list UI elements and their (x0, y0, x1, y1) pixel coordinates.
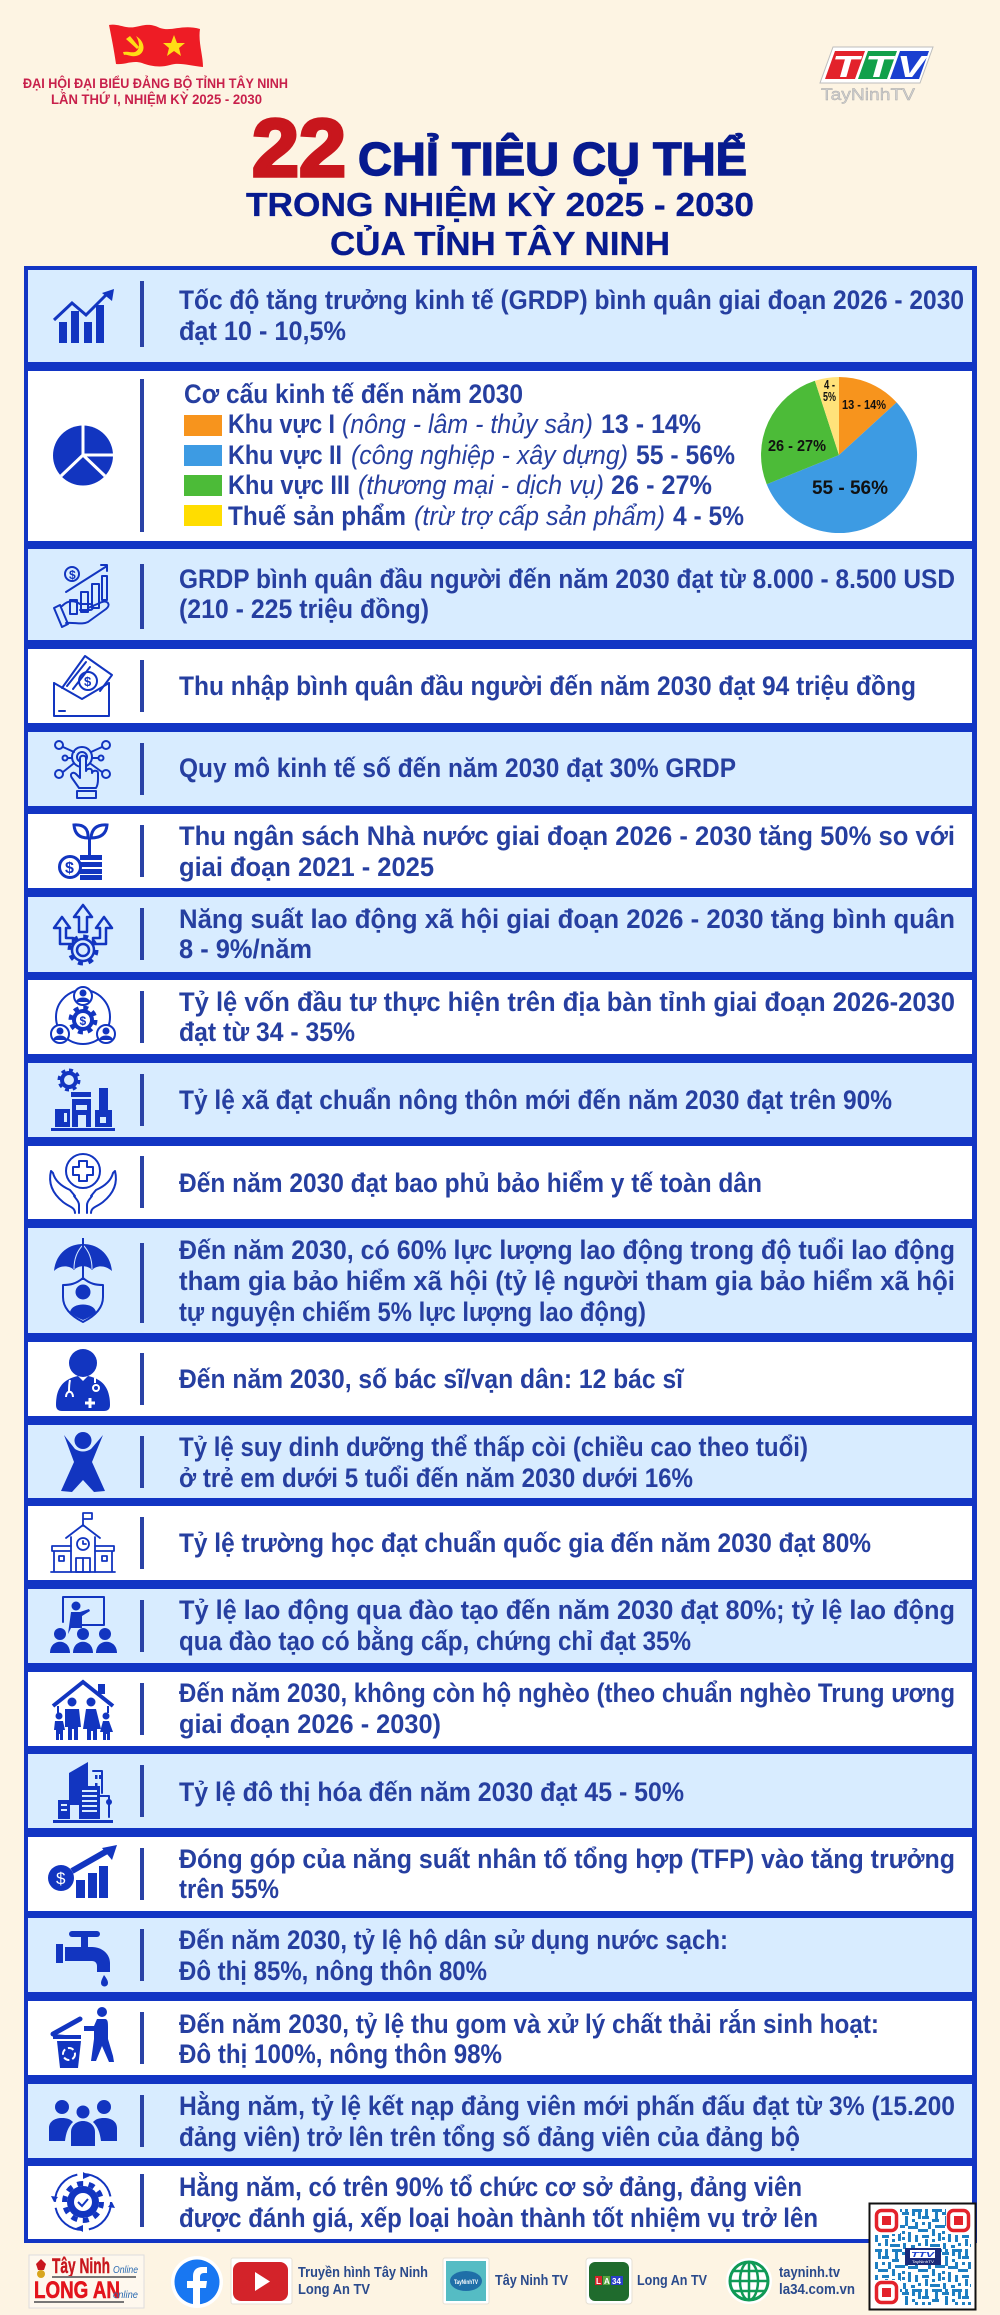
text: target 6: Thu ngân sách Nhà nước giai đoạn 2026 - 2030 tăng 50% so với (179, 821, 955, 851)
text: target 6: giai đoạn 2021 - 2025 (179, 852, 434, 882)
text: target 11: Đến năm 2030, có 60% lực lượng lao động trong độ tuổi lao động (179, 1235, 955, 1265)
text: target 8: đạt từ 34 - 35% (179, 1017, 355, 1047)
icon: hands with medical cross (50, 1154, 116, 1213)
text: target 13: Tỷ lệ suy dinh dưỡng thể thấp còi (chiều cao theo tuổi) (179, 1432, 808, 1462)
panel: target 21 new party members (28, 2084, 972, 2158)
icon: website globe (726, 2258, 772, 2304)
panel: target 11 social insurance (28, 1228, 972, 1333)
footer: newspaper logo Tay Ninh Online / Long An: Online (113, 2265, 138, 2276)
icon: envelope with money: $ (84, 674, 92, 689)
text: target 8: Tỷ lệ vốn đầu tư thực hiện trên địa bàn tỉnh giai đoạn 2026-2030 (179, 987, 955, 1017)
legend: sector III: 26 - 27% (611, 470, 712, 500)
title (246, 103, 754, 262)
text: target 15: Tỷ lệ lao động qua đào tạo đến năm 2030 đạt 80%; tỷ lệ lao động (179, 1595, 955, 1625)
icon: YouTube (231, 2258, 292, 2304)
text: target 7: 8 - 9%/năm (179, 934, 312, 964)
icon: envelope with money (54, 656, 112, 716)
text: structure heading: Cơ cấu kinh tế đến năm 2030 (184, 379, 523, 409)
panel: target 7 labour productivity (28, 897, 972, 972)
panel: target 2 economic structure (28, 371, 972, 541)
text: target 18 (179, 1844, 955, 1904)
text: target 20 (179, 2009, 879, 2069)
icon: gear with check and cycle arrows (51, 2172, 115, 2232)
icon: Long An TV app: A (604, 2277, 610, 2286)
panel: target 3 GRDP per capita (28, 549, 972, 640)
legend: sector II: 55 - 56% (636, 440, 735, 470)
chart: economic structure pie: 5% (823, 389, 836, 404)
text: target 22: được đánh giá, xếp loại hoàn thành tốt nhiệm vụ trở lên (179, 2203, 818, 2233)
legend: product tax: 4 - 5% (673, 501, 744, 531)
text: Tay Ninh TV: Tây Ninh TV (495, 2272, 568, 2289)
text: target 9: Tỷ lệ xã đạt chuẩn nông thôn mới đến năm 2030 đạt trên 90% (179, 1085, 892, 1115)
icon: city buildings (53, 1762, 113, 1823)
text: target 3 (179, 564, 955, 624)
text: target 11 (179, 1235, 955, 1327)
text: target 17: Tỷ lệ đô thị hóa đến năm 2030 đạt 45 - 50% (179, 1777, 684, 1807)
panel: target 19 clean water (28, 1918, 972, 1992)
chart: economic structure pie: 13 - 14% (842, 397, 886, 412)
text: target 20: Đô thị 100%, nông thôn 98% (179, 2039, 502, 2069)
panel: target 12 doctors (28, 1342, 972, 1416)
icon: teacher and students (50, 1597, 117, 1653)
logo: TTV Tay Ninh TV: V (897, 49, 928, 84)
icon: family under a house (53, 1682, 113, 1740)
text: target 22: Hằng năm, có trên 90% tổ chức cơ sở đảng, đảng viên (179, 2172, 802, 2202)
icon: child figure (61, 1432, 105, 1492)
icon: party flag (109, 25, 203, 67)
icon: pie chart (53, 425, 113, 486)
text: target 15: qua đào tạo có bằng cấp, chứng chỉ đạt 35% (179, 1626, 691, 1656)
title: CỦA TỈNH TÂY NINH (330, 225, 670, 262)
icon: investment cycle: $ (80, 1014, 86, 1028)
footer: newspaper logo Tay Ninh Online / Long An (29, 2255, 144, 2308)
icon: hand holding chart (54, 565, 109, 627)
text: target 7 (179, 904, 955, 964)
text: YouTube channel names (298, 2264, 428, 2298)
text: websites: la34.com.vn (779, 2281, 855, 2298)
panel: target 4 income (28, 649, 972, 723)
text: target 11: tham gia bảo hiểm xã hội (tỷ lệ người tham gia bảo hiểm xã hội (179, 1266, 955, 1296)
text: websites: tayninh.tv (779, 2264, 841, 2281)
panel: target 6 state budget (28, 814, 972, 888)
logo: TTV Tay Ninh TV: TayNinhTV (821, 85, 916, 104)
text: YouTube channel names: Long An TV (298, 2281, 370, 2298)
text: websites (779, 2264, 855, 2298)
panel: target 5 digital economy (28, 732, 972, 806)
panel: target 17 urbanisation (28, 1754, 972, 1828)
icon: arrows and gear (54, 905, 112, 964)
text: target 20: Đến năm 2030, tỷ lệ thu gom và xử lý chất thải rắn sinh hoạt: (179, 2009, 879, 2039)
panel: target 16 no poor households (28, 1672, 972, 1746)
text: target 13 (179, 1432, 808, 1493)
legend: sector I: (nông - lâm - thủy sản) (342, 409, 593, 439)
icon: school (51, 1513, 115, 1572)
panel: target 10 health insurance (28, 1146, 972, 1219)
text: target 16 (179, 1678, 955, 1739)
text: target 1: đạt 10 - 10,5% (179, 316, 346, 346)
text: target 21 (179, 2091, 955, 2152)
text: target 10: Đến năm 2030 đạt bao phủ bảo hiểm y tế toàn dân (179, 1168, 762, 1198)
icon: investment cycle (51, 987, 115, 1044)
legend: sector I: Khu vực I (228, 409, 335, 439)
icon: hand holding chart: $ (69, 568, 76, 582)
chart: economic structure pie: 55 - 56% (812, 478, 888, 499)
chart: economic structure pie: 4 - (824, 377, 835, 392)
icon: Tay Ninh TV app (443, 2258, 489, 2304)
header: party congress emblem and name (23, 25, 288, 107)
text: target 1 (179, 285, 964, 346)
text: Long An TV: Long An TV (637, 2272, 707, 2289)
legend: sector III (184, 470, 712, 500)
text: target 3: GRDP bình quân đầu người đến năm 2030 đạt từ 8.000 - 8.500 USD (179, 564, 955, 594)
QR code: TayNinhTV (912, 2259, 934, 2264)
QR code (870, 2204, 976, 2310)
chart: economic structure pie (761, 377, 917, 533)
text: target 21: Hằng năm, tỷ lệ kết nạp đảng viên mới phấn đấu đạt từ 3% (15.200 (179, 2091, 955, 2121)
text: target 18: trên 55% (179, 1874, 279, 1904)
legend: product tax: Thuế sản phẩm (228, 501, 406, 531)
icon: Long An TV app (586, 2258, 632, 2304)
text: target 15 (179, 1595, 955, 1656)
logo: TTV Tay Ninh TV (820, 47, 933, 104)
text: target 19: Đến năm 2030, tỷ lệ hộ dân sử dụng nước sạch: (179, 1925, 728, 1955)
icon: plant on coins (60, 825, 107, 880)
legend: sector II (184, 440, 735, 470)
icon: network touch (55, 741, 110, 798)
text: target 3: (210 - 225 triệu đồng) (179, 594, 429, 624)
text: target 21: đảng viên) trở lên trên tổng số đảng viên của đảng bộ (179, 2122, 800, 2152)
icon: dollar coin with growth arrow: $ (56, 1869, 66, 1888)
text: target 4: Thu nhập bình quân đầu người đến năm 2030 đạt 94 triệu đồng (179, 671, 916, 701)
title: 22 (252, 103, 346, 194)
text: target 19 (179, 1925, 728, 1986)
chart: economic structure pie: 26 - 27% (768, 438, 826, 455)
title: TRONG NHIỆM KỲ 2025 - 2030 (246, 186, 754, 223)
legend: sector I: 13 - 14% (601, 409, 701, 439)
panel: target 20 solid waste (28, 2001, 972, 2075)
text: target 22 (179, 2172, 818, 2233)
logo: TTV Tay Ninh TV: T (865, 49, 896, 84)
text: target 18: Đóng góp của năng suất nhân tố tổng hợp (TFP) vào tăng trưởng (179, 1844, 955, 1874)
panel: target 14 national-standard schools (28, 1506, 972, 1580)
legend: sector III: Khu vực III (228, 470, 350, 500)
text: congress name (23, 76, 288, 107)
text: target 7: Năng suất lao động xã hội giai đoạn 2026 - 2030 tăng bình quân (179, 904, 955, 934)
panel: target 9 new rural communes (28, 1063, 972, 1137)
footer: newspaper logo Tay Ninh Online / Long An: LONG AN (34, 2277, 120, 2304)
icon: water tap (56, 1931, 110, 1987)
text: target 11: tự nguyện chiếm 5% lực lượng lao động) (179, 1297, 646, 1327)
text: target 14: Tỷ lệ trường học đạt chuẩn quốc gia đến năm 2030 đạt 80% (179, 1528, 871, 1558)
panel: target 13 child stunting (28, 1425, 972, 1498)
legend: sector III: (thương mại - dịch vụ) (358, 470, 604, 500)
icon: person dropping rubbish in bin (53, 2007, 114, 2068)
legend: sector II: (công nghiệp - xây dựng) (351, 440, 628, 470)
QR code: TTV (911, 2252, 936, 2259)
legend: sector II: Khu vực II (228, 440, 342, 470)
icon: three people (49, 2100, 117, 2146)
text: target 13: ở trẻ em dưới 5 tuổi đến năm 2030 dưới 16% (179, 1463, 693, 1493)
legend: product tax: (trừ trợ cấp sản phẩm) (414, 501, 665, 531)
text: congress name: ĐẠI HỘI ĐẠI BIỂU ĐẢNG BỘ TỈNH TÂY NINH (23, 76, 288, 91)
panel: target 8 investment capital (28, 980, 972, 1054)
icon: plant on coins: $ (65, 860, 74, 877)
text: target 6 (179, 821, 955, 882)
panel: target 1 GRDP growth (28, 270, 972, 362)
title: CHỈ TIÊU CỤ THỂ (358, 133, 747, 185)
icon: growth bars with arrow (54, 289, 114, 343)
text: YouTube channel names: Truyền hình Tây Ninh (298, 2264, 428, 2281)
text: target 5: Quy mô kinh tế số đến năm 2030 đạt 30% GRDP (179, 753, 736, 783)
icon: factory with gear (51, 1070, 115, 1131)
icon: Long An TV app: L (596, 2277, 601, 2286)
text: target 8 (179, 987, 955, 1047)
text: target 19: Đô thị 85%, nông thôn 80% (179, 1956, 487, 1986)
text: target 16: giai đoạn 2026 - 2030) (179, 1709, 441, 1739)
legend: sector I (184, 409, 701, 439)
panel: target 15 trained labour (28, 1589, 972, 1663)
icon: Tay Ninh TV app: TayNinhTV (454, 2280, 478, 2286)
icon: doctor (56, 1349, 110, 1411)
text: congress name: LẦN THỨ I, NHIỆM KỲ 2025 - 2030 (51, 92, 262, 107)
footer: newspaper logo Tay Ninh Online / Long An: Tây Ninh (52, 2255, 110, 2278)
text: target 12: Đến năm 2030, số bác sĩ/vạn dân: 12 bác sĩ (179, 1364, 685, 1394)
panel: target 22 party organisations (28, 2166, 972, 2239)
logo: TTV Tay Ninh TV: T (832, 49, 863, 84)
icon: dollar coin with growth arrow (48, 1845, 117, 1898)
legend: product tax (184, 501, 744, 531)
panel: target 18 TFP contribution (28, 1837, 972, 1911)
icon: Long An TV app: 34 (612, 2277, 621, 2286)
footer: newspaper logo Tay Ninh Online / Long An: online (113, 2290, 138, 2301)
icon: Facebook (171, 2256, 223, 2308)
icon: umbrella over insured person (54, 1238, 112, 1322)
